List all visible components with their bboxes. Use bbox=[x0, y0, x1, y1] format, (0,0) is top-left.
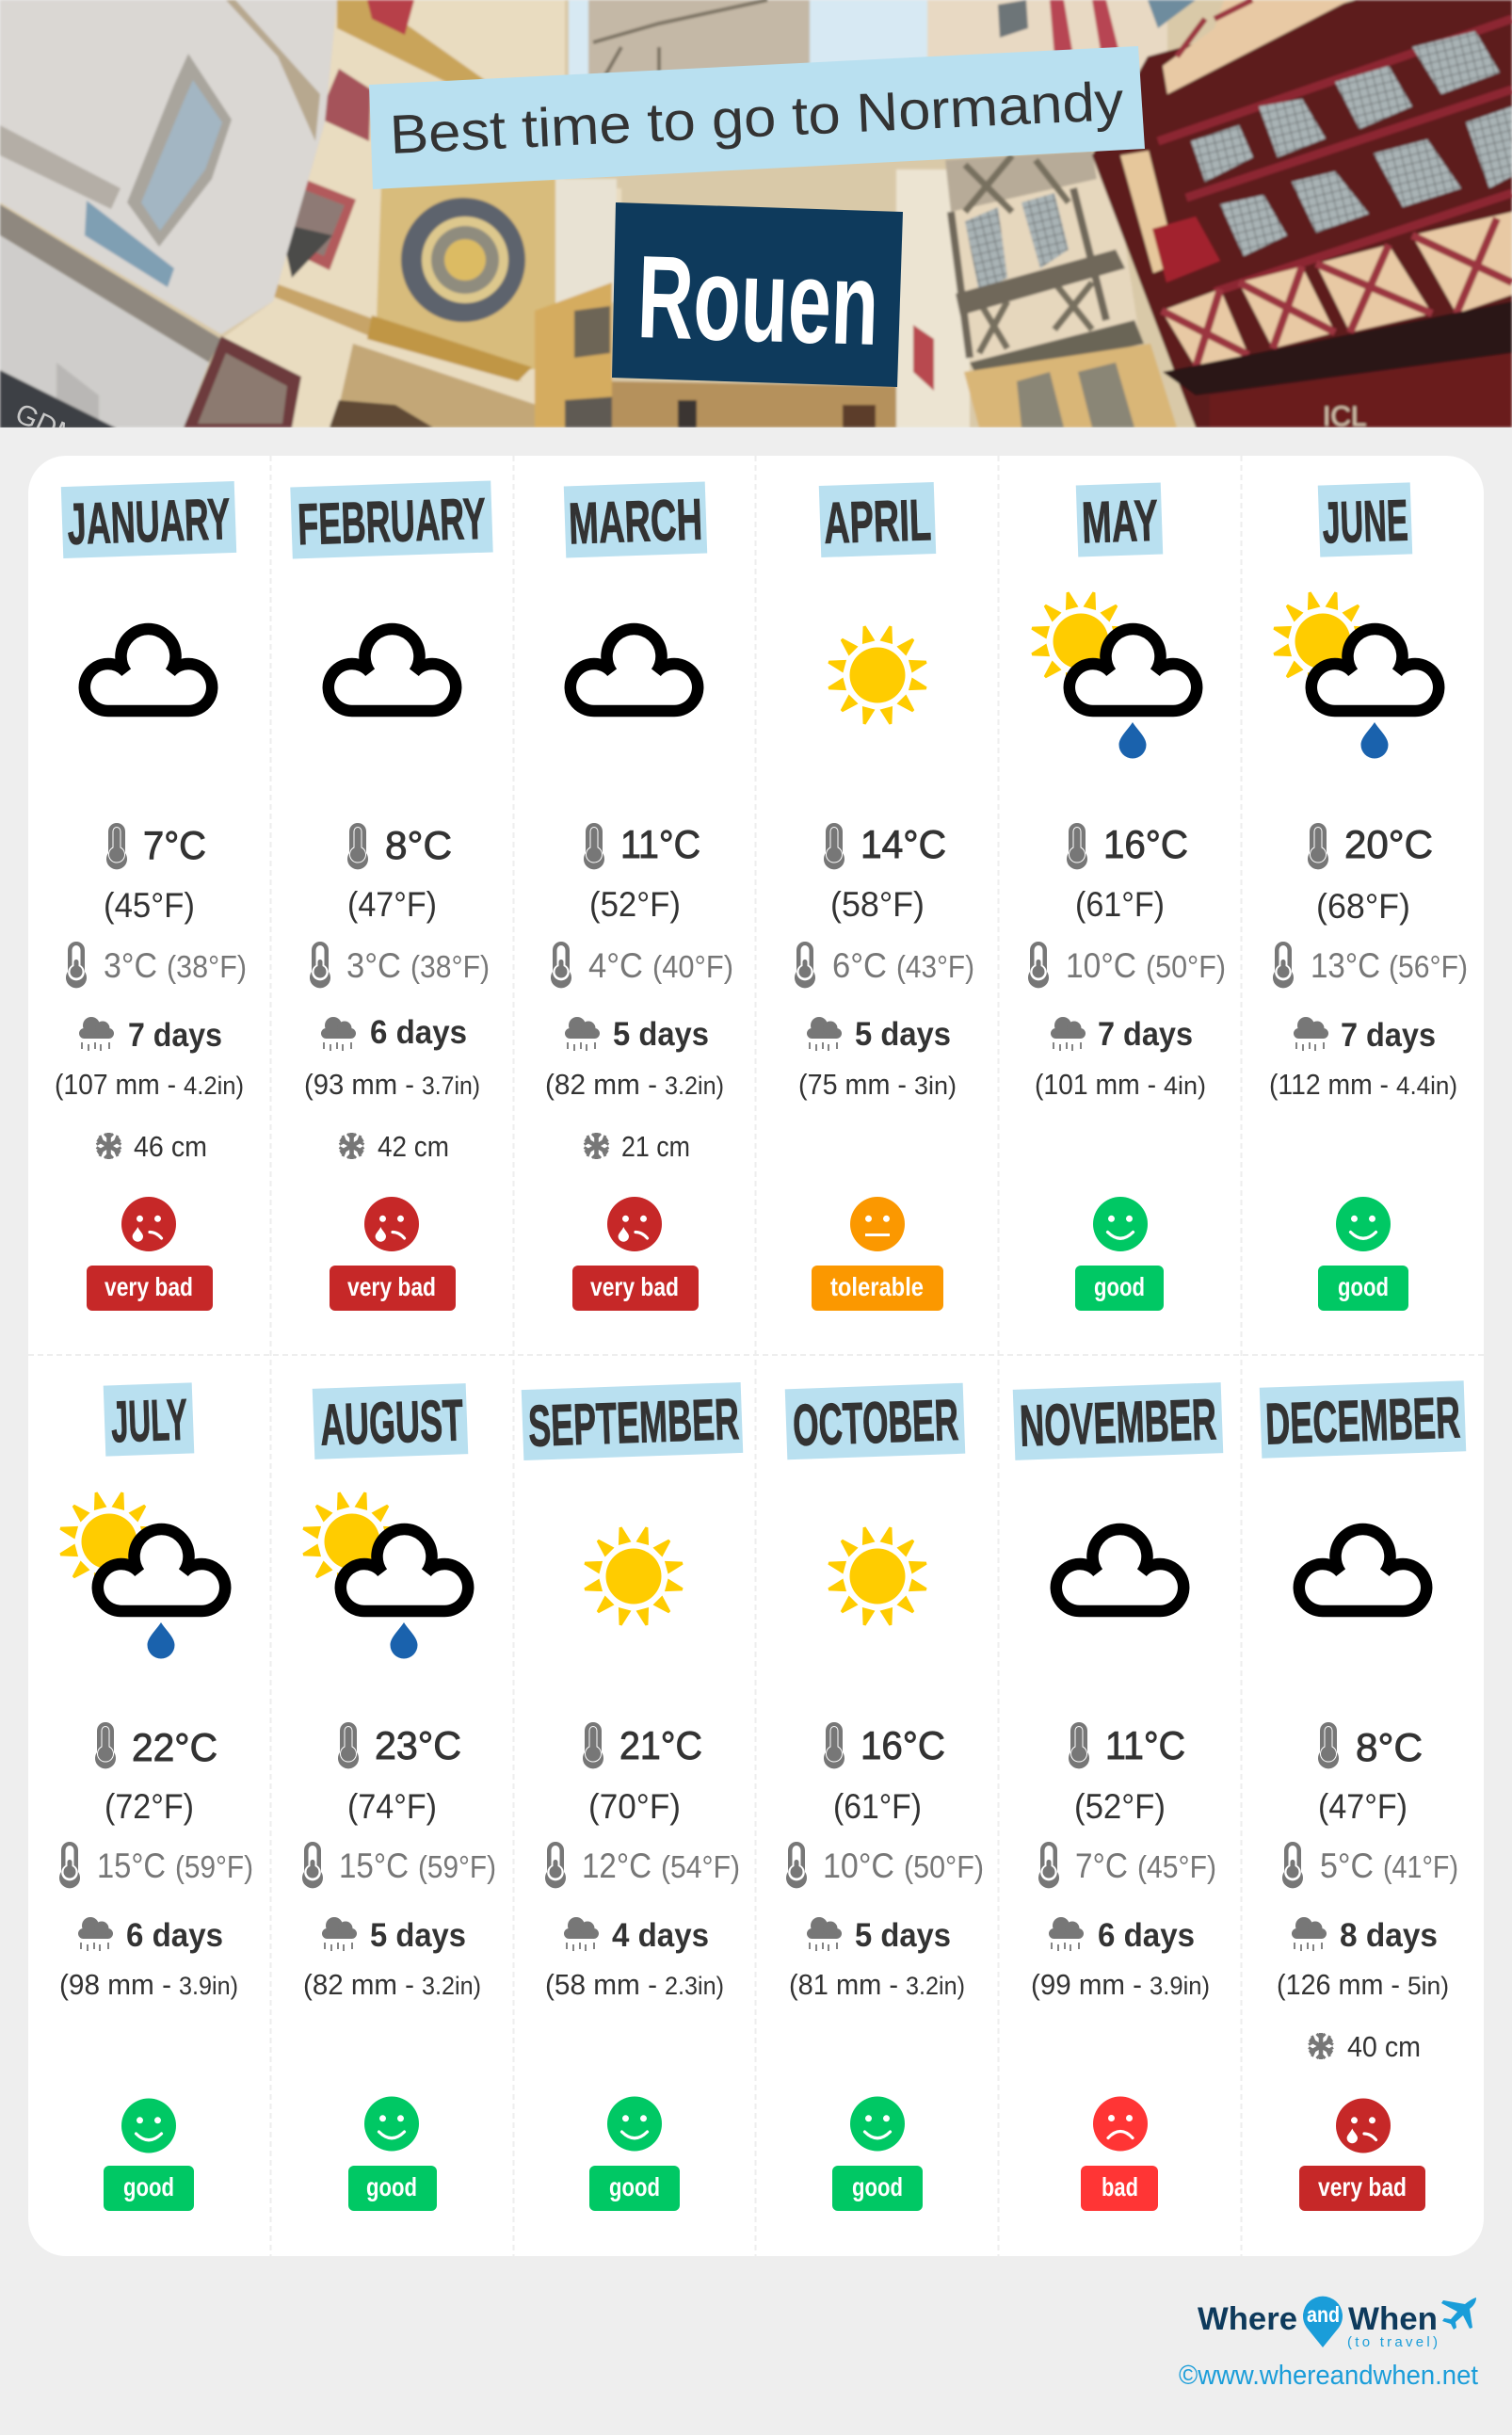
snowfall bbox=[339, 1130, 449, 1163]
rainfall: 3.7in) bbox=[422, 1072, 480, 1100]
rating badge: very bad bbox=[105, 1272, 193, 1301]
panel: August bbox=[301, 1383, 496, 2211]
logo: Where and When (to travel): Where bbox=[1198, 2301, 1297, 2337]
rainfall: 7 days bbox=[1098, 1016, 1193, 1053]
high temperature: (70°F) bbox=[588, 1787, 681, 1826]
icon: rating face bbox=[364, 2096, 419, 2151]
rainfall: 6 days bbox=[126, 1917, 223, 1954]
hero photo: Rouen street bbox=[0, 0, 1512, 454]
rating badge bbox=[589, 2166, 680, 2211]
low temperature bbox=[59, 1842, 253, 1888]
low temperature bbox=[1273, 942, 1468, 988]
rating badge bbox=[572, 1266, 699, 1311]
rainfall: 5 days bbox=[855, 1016, 951, 1053]
panel: December bbox=[1260, 1380, 1466, 2211]
high temperature bbox=[1318, 1722, 1423, 1826]
icon: cloud bbox=[571, 629, 698, 711]
low temperature: 3°C bbox=[346, 946, 401, 985]
high temperature: 11°C bbox=[620, 822, 700, 866]
low temperature: (40°F) bbox=[652, 949, 733, 984]
month heading: APRIL bbox=[823, 488, 932, 556]
panel: May bbox=[1028, 483, 1226, 1311]
rainfall: 3.2in) bbox=[906, 1972, 965, 2000]
icon: sun, cloud and rain drop bbox=[58, 1491, 225, 1659]
high temperature: 21°C bbox=[619, 1723, 702, 1767]
logo: Where and When (to travel): and bbox=[1307, 2302, 1340, 2327]
high temperature bbox=[104, 823, 206, 925]
high temperature: (47°F) bbox=[347, 885, 437, 924]
low temperature: (38°F) bbox=[167, 949, 247, 984]
high temperature: (58°F) bbox=[830, 885, 925, 924]
high temperature: 20°C bbox=[1344, 822, 1433, 866]
logo: Where and When (to travel) bbox=[1198, 2297, 1476, 2350]
low temperature: 12°C bbox=[582, 1846, 651, 1885]
rainfall: (126 mm - bbox=[1277, 1968, 1400, 2001]
high temperature bbox=[824, 822, 946, 924]
month heading bbox=[522, 1382, 743, 1460]
rainfall: (101 mm - bbox=[1035, 1068, 1156, 1101]
icon: map pin bbox=[1303, 2297, 1343, 2347]
rainfall: (107 mm - bbox=[55, 1068, 176, 1101]
month heading: JANUARY bbox=[66, 487, 232, 557]
rainfall: 5in) bbox=[1407, 1972, 1449, 2000]
high temperature bbox=[347, 823, 452, 924]
rainfall: 8 days bbox=[1340, 1917, 1438, 1954]
title banner: Best time to go to Normandy bbox=[389, 71, 1125, 166]
rating badge: good bbox=[1094, 1272, 1145, 1301]
rainfall bbox=[1269, 1017, 1457, 1101]
rating badge bbox=[330, 1266, 456, 1311]
city name: Rouen bbox=[612, 202, 903, 387]
main card bbox=[28, 456, 1484, 2256]
low temperature: (59°F) bbox=[175, 1849, 253, 1884]
panel: September bbox=[522, 1382, 743, 2211]
month heading bbox=[1318, 482, 1412, 557]
hero photo: Rouen street: ICL bbox=[1323, 401, 1367, 432]
icon: rating face bbox=[121, 2098, 176, 2153]
rating badge: very bad bbox=[1318, 2172, 1407, 2201]
month heading: SEPTEMBER bbox=[527, 1387, 740, 1459]
month heading bbox=[564, 482, 707, 557]
city name: Rouen: Rouen bbox=[635, 232, 880, 370]
high temperature: (61°F) bbox=[833, 1787, 922, 1826]
low temperature bbox=[1282, 1842, 1458, 1888]
rainfall: 3.9in) bbox=[1150, 1972, 1210, 2000]
low temperature: (54°F) bbox=[661, 1849, 740, 1884]
icon: rating face bbox=[364, 1197, 419, 1251]
snowfall: 42 cm bbox=[378, 1130, 449, 1163]
icon: rating face bbox=[121, 1197, 176, 1251]
high temperature: 16°C bbox=[1103, 822, 1188, 866]
month heading bbox=[290, 480, 493, 559]
rating badge bbox=[348, 2166, 437, 2211]
low temperature bbox=[310, 942, 490, 988]
high temperature: 16°C bbox=[861, 1723, 945, 1767]
high temperature: (52°F) bbox=[1074, 1787, 1166, 1826]
icon: sun, cloud and rain drop bbox=[1030, 590, 1197, 759]
icon: rating face bbox=[1093, 2096, 1148, 2151]
rating badge: tolerable bbox=[830, 1272, 924, 1301]
month heading bbox=[313, 1383, 468, 1459]
rating badge: good bbox=[366, 2172, 417, 2201]
high temperature: 23°C bbox=[375, 1723, 461, 1767]
rainfall bbox=[798, 1016, 957, 1101]
hero photo: Rouen street: GDM bbox=[10, 397, 83, 454]
rainfall: 6 days bbox=[370, 1014, 467, 1051]
rainfall: (58 mm - bbox=[545, 1968, 657, 2001]
icon: rating face bbox=[1336, 2098, 1391, 2153]
icon: rating face bbox=[607, 1197, 662, 1251]
month heading: OCTOBER bbox=[792, 1388, 959, 1459]
icon: rating face bbox=[1336, 1197, 1391, 1251]
rainfall: (112 mm - bbox=[1269, 1068, 1389, 1101]
low temperature: 3°C bbox=[104, 946, 157, 985]
rainfall: 7 days bbox=[1341, 1017, 1436, 1054]
low temperature: (45°F) bbox=[1137, 1849, 1216, 1884]
low temperature bbox=[302, 1842, 496, 1888]
low temperature: (56°F) bbox=[1389, 949, 1468, 984]
icon: cloud bbox=[85, 629, 212, 711]
high temperature: 14°C bbox=[861, 822, 946, 866]
low temperature: 5°C bbox=[1320, 1846, 1374, 1885]
rating badge bbox=[1081, 2166, 1158, 2211]
panel: October bbox=[785, 1383, 984, 2211]
rainfall: (98 mm - bbox=[59, 1968, 171, 2001]
month heading: JULY bbox=[110, 1388, 188, 1455]
rainfall bbox=[1035, 1016, 1206, 1101]
rainfall bbox=[545, 1016, 724, 1101]
low temperature: 6°C bbox=[832, 946, 887, 985]
high temperature bbox=[583, 1722, 702, 1826]
high temperature: (74°F) bbox=[347, 1787, 437, 1826]
high temperature: (72°F) bbox=[105, 1787, 194, 1826]
logo: Where and When (to travel): When bbox=[1348, 2301, 1438, 2337]
rainfall: 3in) bbox=[914, 1072, 957, 1100]
high temperature: (61°F) bbox=[1075, 885, 1165, 924]
rating badge: very bad bbox=[347, 1272, 436, 1301]
month heading: MARCH bbox=[568, 488, 703, 556]
rainfall: 4.4in) bbox=[1396, 1072, 1457, 1100]
rainfall: (82 mm - bbox=[545, 1068, 657, 1101]
icon: sun bbox=[583, 1525, 684, 1627]
rainfall: (99 mm - bbox=[1031, 1968, 1142, 2001]
rating badge bbox=[1318, 1266, 1408, 1311]
icon: cloud bbox=[1056, 1529, 1183, 1611]
low temperature bbox=[1028, 942, 1226, 988]
panel: July bbox=[58, 1382, 253, 2211]
low temperature: 15°C bbox=[97, 1846, 166, 1885]
rating badge bbox=[104, 2166, 194, 2211]
panel: April bbox=[795, 482, 974, 1311]
high temperature bbox=[1308, 822, 1433, 926]
low temperature: 10°C bbox=[1066, 946, 1136, 985]
title banner bbox=[369, 46, 1145, 189]
low temperature: (50°F) bbox=[1146, 949, 1226, 984]
low temperature bbox=[66, 942, 247, 988]
rainfall: (82 mm - bbox=[303, 1968, 414, 2001]
rainfall: (93 mm - bbox=[304, 1068, 414, 1101]
rainfall bbox=[1031, 1917, 1210, 2001]
rainfall: 3.2in) bbox=[665, 1072, 724, 1100]
rainfall: 7 days bbox=[128, 1017, 222, 1054]
rainfall: (81 mm - bbox=[789, 1968, 898, 2001]
rating badge: good bbox=[123, 2172, 174, 2201]
rainfall bbox=[1277, 1917, 1449, 2001]
high temperature: 8°C bbox=[1356, 1725, 1423, 1769]
icon: rating face bbox=[1093, 1197, 1148, 1251]
high temperature bbox=[338, 1722, 461, 1826]
snowfall bbox=[96, 1130, 207, 1163]
rating badge bbox=[1299, 2166, 1425, 2211]
month heading: JUNE bbox=[1321, 489, 1409, 556]
icon: sun bbox=[827, 1525, 928, 1627]
rainfall bbox=[545, 1917, 724, 2001]
high temperature bbox=[95, 1722, 217, 1826]
low temperature bbox=[545, 1842, 740, 1888]
rainfall: 3.9in) bbox=[179, 1972, 238, 2000]
panel: March bbox=[545, 482, 733, 1311]
low temperature bbox=[795, 942, 974, 988]
panel: January bbox=[55, 481, 247, 1311]
rating badge bbox=[1075, 1266, 1164, 1311]
rainfall: 5 days bbox=[370, 1917, 466, 1954]
snowfall bbox=[1309, 2030, 1421, 2063]
rating badge: good bbox=[609, 2172, 660, 2201]
low temperature: (41°F) bbox=[1383, 1849, 1458, 1884]
low temperature: (38°F) bbox=[410, 949, 490, 984]
low temperature: (43°F) bbox=[896, 949, 974, 984]
low temperature: 15°C bbox=[339, 1846, 409, 1885]
rating badge: good bbox=[1338, 1272, 1389, 1301]
low temperature bbox=[786, 1842, 984, 1888]
rainfall: 2.3in) bbox=[665, 1972, 724, 2000]
rainfall bbox=[303, 1917, 481, 2001]
rating badge: bad bbox=[1102, 2172, 1138, 2201]
month heading bbox=[104, 1382, 194, 1457]
icon: rating face bbox=[607, 2096, 662, 2151]
month heading: FEBRUARY bbox=[297, 487, 487, 557]
icon: sun bbox=[827, 624, 928, 726]
rainfall bbox=[789, 1917, 965, 2001]
rating badge bbox=[812, 1266, 943, 1311]
high temperature: 22°C bbox=[132, 1725, 217, 1769]
month heading bbox=[1076, 483, 1163, 556]
rainfall: 4.2in) bbox=[184, 1072, 244, 1100]
high temperature bbox=[824, 1722, 945, 1826]
low temperature: 7°C bbox=[1075, 1846, 1128, 1885]
high temperature: 11°C bbox=[1105, 1723, 1185, 1767]
high temperature bbox=[1067, 822, 1188, 924]
month heading bbox=[1013, 1382, 1223, 1460]
month heading bbox=[785, 1383, 965, 1459]
rating badge bbox=[832, 2166, 923, 2211]
low temperature bbox=[551, 942, 733, 988]
rainfall: 5 days bbox=[855, 1917, 951, 1954]
rainfall bbox=[55, 1017, 244, 1101]
snowfall: 40 cm bbox=[1347, 2030, 1421, 2063]
high temperature bbox=[584, 822, 700, 924]
panel: February bbox=[290, 480, 493, 1311]
high temperature: (52°F) bbox=[589, 885, 681, 924]
rating badge: very bad bbox=[590, 1272, 679, 1301]
high temperature: (68°F) bbox=[1316, 887, 1410, 926]
month heading: AUGUST bbox=[319, 1388, 464, 1459]
rainfall: 4in) bbox=[1164, 1072, 1206, 1100]
low temperature: 10°C bbox=[823, 1846, 894, 1885]
snowfall: 21 cm bbox=[621, 1130, 690, 1163]
low temperature: 4°C bbox=[588, 946, 643, 985]
high temperature: (45°F) bbox=[104, 886, 195, 925]
icon: airplane bbox=[1441, 2298, 1476, 2330]
snowfall: 46 cm bbox=[134, 1130, 207, 1163]
high temperature: 8°C bbox=[385, 823, 452, 867]
low temperature bbox=[1038, 1842, 1216, 1888]
snowfall bbox=[584, 1130, 690, 1163]
rainfall: 3.2in) bbox=[422, 1972, 481, 2000]
rainfall: 6 days bbox=[1098, 1917, 1195, 1954]
month heading: MAY bbox=[1081, 489, 1159, 556]
logo: Where and When (to travel): (to travel) bbox=[1347, 2334, 1438, 2350]
icon: rating face bbox=[850, 1197, 905, 1251]
icon: cloud bbox=[1299, 1529, 1426, 1611]
month heading: NOVEMBER bbox=[1019, 1387, 1217, 1459]
rainfall bbox=[304, 1014, 480, 1101]
icon: cloud bbox=[329, 629, 456, 711]
icon: rating face bbox=[850, 2096, 905, 2151]
high temperature: 7°C bbox=[143, 823, 206, 867]
month heading bbox=[61, 481, 236, 558]
icon: sun, cloud and rain drop bbox=[1272, 590, 1439, 759]
high temperature: (47°F) bbox=[1318, 1787, 1407, 1826]
website credit: ©www.whereandwhen.net bbox=[1179, 2361, 1478, 2391]
rainfall bbox=[59, 1917, 238, 2001]
panel: June bbox=[1269, 482, 1468, 1311]
rainfall: 5 days bbox=[613, 1016, 709, 1053]
icon: sun, cloud and rain drop bbox=[301, 1491, 468, 1659]
rating badge: good bbox=[852, 2172, 903, 2201]
rating badge bbox=[87, 1266, 213, 1311]
low temperature: 13°C bbox=[1311, 946, 1380, 985]
low temperature: (59°F) bbox=[418, 1849, 496, 1884]
panel: November bbox=[1013, 1382, 1223, 2211]
low temperature: (50°F) bbox=[904, 1849, 984, 1884]
high temperature bbox=[1069, 1722, 1185, 1826]
rainfall: (75 mm - bbox=[798, 1068, 907, 1101]
rainfall: 4 days bbox=[612, 1917, 709, 1954]
month heading bbox=[819, 482, 936, 557]
